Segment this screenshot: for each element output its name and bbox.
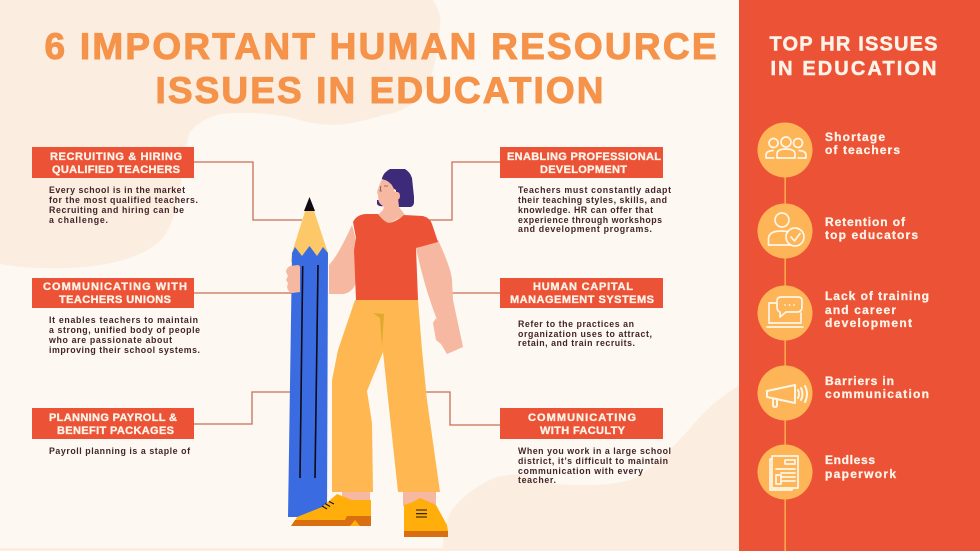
panel: communicating with teachers unions: a strong, unified body of people: [49, 325, 200, 335]
hair: [382, 169, 414, 207]
panel: communicating with teachers unions: COMMUNICATING WITH: [43, 281, 187, 293]
panel: recruiting and hiring: Recruiting and hiring can be: [49, 205, 184, 215]
neck: [378, 198, 405, 224]
panel: human capital management systems: organization uses to attract,: [518, 329, 652, 339]
panel: human capital management systems: HUMAN CAPITAL: [533, 281, 633, 293]
icon: laptop with speech bubble: [767, 297, 803, 327]
eye and nose: [380, 186, 388, 191]
panel: communicating with teachers unions: TEACHERS UNIONS: [59, 294, 171, 306]
title: [44, 26, 716, 111]
panel: communicating with teachers unions: [32, 278, 200, 355]
panel: recruiting and hiring: for the most qualified teachers.: [49, 195, 198, 205]
item: endless paperwork: [758, 444, 896, 500]
panel: enabling professional development: and development programs.: [518, 224, 652, 234]
item: shortage of teachers: Shortage: [825, 130, 885, 144]
panel: communicating with faculty: communication with every: [518, 466, 643, 476]
panel: communicating with teachers unions: improving their school systems.: [49, 345, 200, 355]
left shoe: [292, 494, 371, 526]
panel: enabling professional development: [500, 147, 671, 234]
sidebar title: [770, 34, 938, 80]
panel: communicating with faculty: WITH FACULTY: [540, 425, 626, 437]
sidebar title: TOP HR ISSUES: [770, 34, 938, 56]
panel: enabling professional development: Teachers must constantly adapt: [518, 185, 671, 195]
item: retention of top educators: Retention of: [825, 215, 906, 229]
icon: person with check: [768, 213, 804, 246]
item: shortage of teachers: of teachers: [825, 143, 900, 157]
panel: communicating with teachers unions: It enables teachers to maintain: [49, 315, 198, 325]
item: retention of top educators: [758, 204, 918, 258]
panel: communicating with faculty: district, it’s difficult to maintain: [518, 456, 668, 466]
panel: recruiting and hiring: RECRUITING & HIRING: [50, 151, 182, 163]
connector: recruiting to pencil: [194, 162, 302, 220]
item: endless paperwork: Endless: [825, 453, 875, 467]
panel: enabling professional development: their teaching styles, skills, and: [518, 195, 667, 205]
panel: enabling professional development: knowledge. HR can offer that: [518, 205, 653, 215]
item: lack of training: Lack of training: [825, 289, 929, 303]
item: lack of training: and career: [825, 303, 896, 317]
panel: communicating with faculty: teacher.: [518, 475, 556, 485]
panel: human capital management systems: MANAGEMENT SYSTEMS: [510, 294, 654, 306]
panel: planning payroll: [32, 408, 194, 456]
panel: recruiting and hiring: a challenge.: [49, 215, 108, 225]
face: [377, 179, 400, 207]
icon: group of people: [766, 137, 806, 158]
panel: communicating with teachers unions: who are passionate about: [48, 335, 172, 345]
item: barriers in communication: communication: [825, 387, 929, 401]
connector: faculty: [415, 392, 500, 425]
shirt: [353, 214, 438, 300]
item: barriers in communication: [758, 366, 929, 420]
item: shortage of teachers: [758, 122, 900, 178]
illustration: pencil: [288, 197, 328, 517]
panel: planning payroll: BENEFIT PACKAGES: [57, 425, 174, 437]
ankles: [342, 490, 436, 506]
icon: document: [770, 456, 798, 490]
panel: recruiting and hiring: [32, 147, 198, 225]
fingers gripping pencil: [286, 265, 300, 293]
panel: planning payroll: Payroll planning is a staple of: [49, 446, 190, 456]
sidebar title: IN EDUCATION: [770, 58, 936, 80]
title: ISSUES IN EDUCATION: [156, 70, 604, 111]
icon: megaphone: [767, 385, 807, 407]
trouser crease: [373, 313, 384, 347]
trousers: [332, 300, 440, 492]
panel: enabling professional development: experience through workshops: [518, 215, 662, 225]
item: retention of top educators: top educators: [825, 228, 918, 242]
panel: recruiting and hiring: Every school is in the market: [49, 185, 185, 195]
connector: professional development to figure: [425, 162, 500, 220]
panel: enabling professional development: DEVELOPMENT: [540, 164, 627, 176]
panel: communicating with faculty: COMMUNICATING: [528, 412, 636, 424]
back arm and hand: [329, 225, 357, 294]
panel: planning payroll: PLANNING PAYROLL &: [49, 412, 177, 424]
item: lack of training: [758, 286, 929, 340]
connector: payroll: [194, 392, 295, 424]
connector: teachers unions: [194, 292, 295, 294]
panel: human capital management systems: [500, 278, 663, 348]
panel: enabling professional development: ENABLING PROFESSIONAL: [507, 151, 661, 163]
sidebar panel: [739, 0, 980, 551]
panel: recruiting and hiring: QUALIFIED TEACHERS: [52, 164, 180, 176]
panel: human capital management systems: retain, and train recruits.: [518, 338, 635, 348]
panel: communicating with faculty: [500, 408, 671, 485]
panel: communicating with faculty: When you work in a large school: [518, 446, 671, 456]
connector: human capital: [445, 292, 500, 294]
panel: human capital management systems: Refer to the practices an: [518, 319, 634, 329]
item: endless paperwork: paperwork: [825, 467, 896, 481]
hair at chin: [377, 200, 384, 206]
item: barriers in communication: Barriers in: [825, 374, 894, 388]
right shoe: [404, 498, 448, 531]
front arm: [416, 240, 463, 354]
item: lack of training: development: [825, 316, 912, 330]
illustration: woman: [286, 169, 463, 537]
title: 6 IMPORTANT HUMAN RESOURCE: [44, 26, 716, 67]
